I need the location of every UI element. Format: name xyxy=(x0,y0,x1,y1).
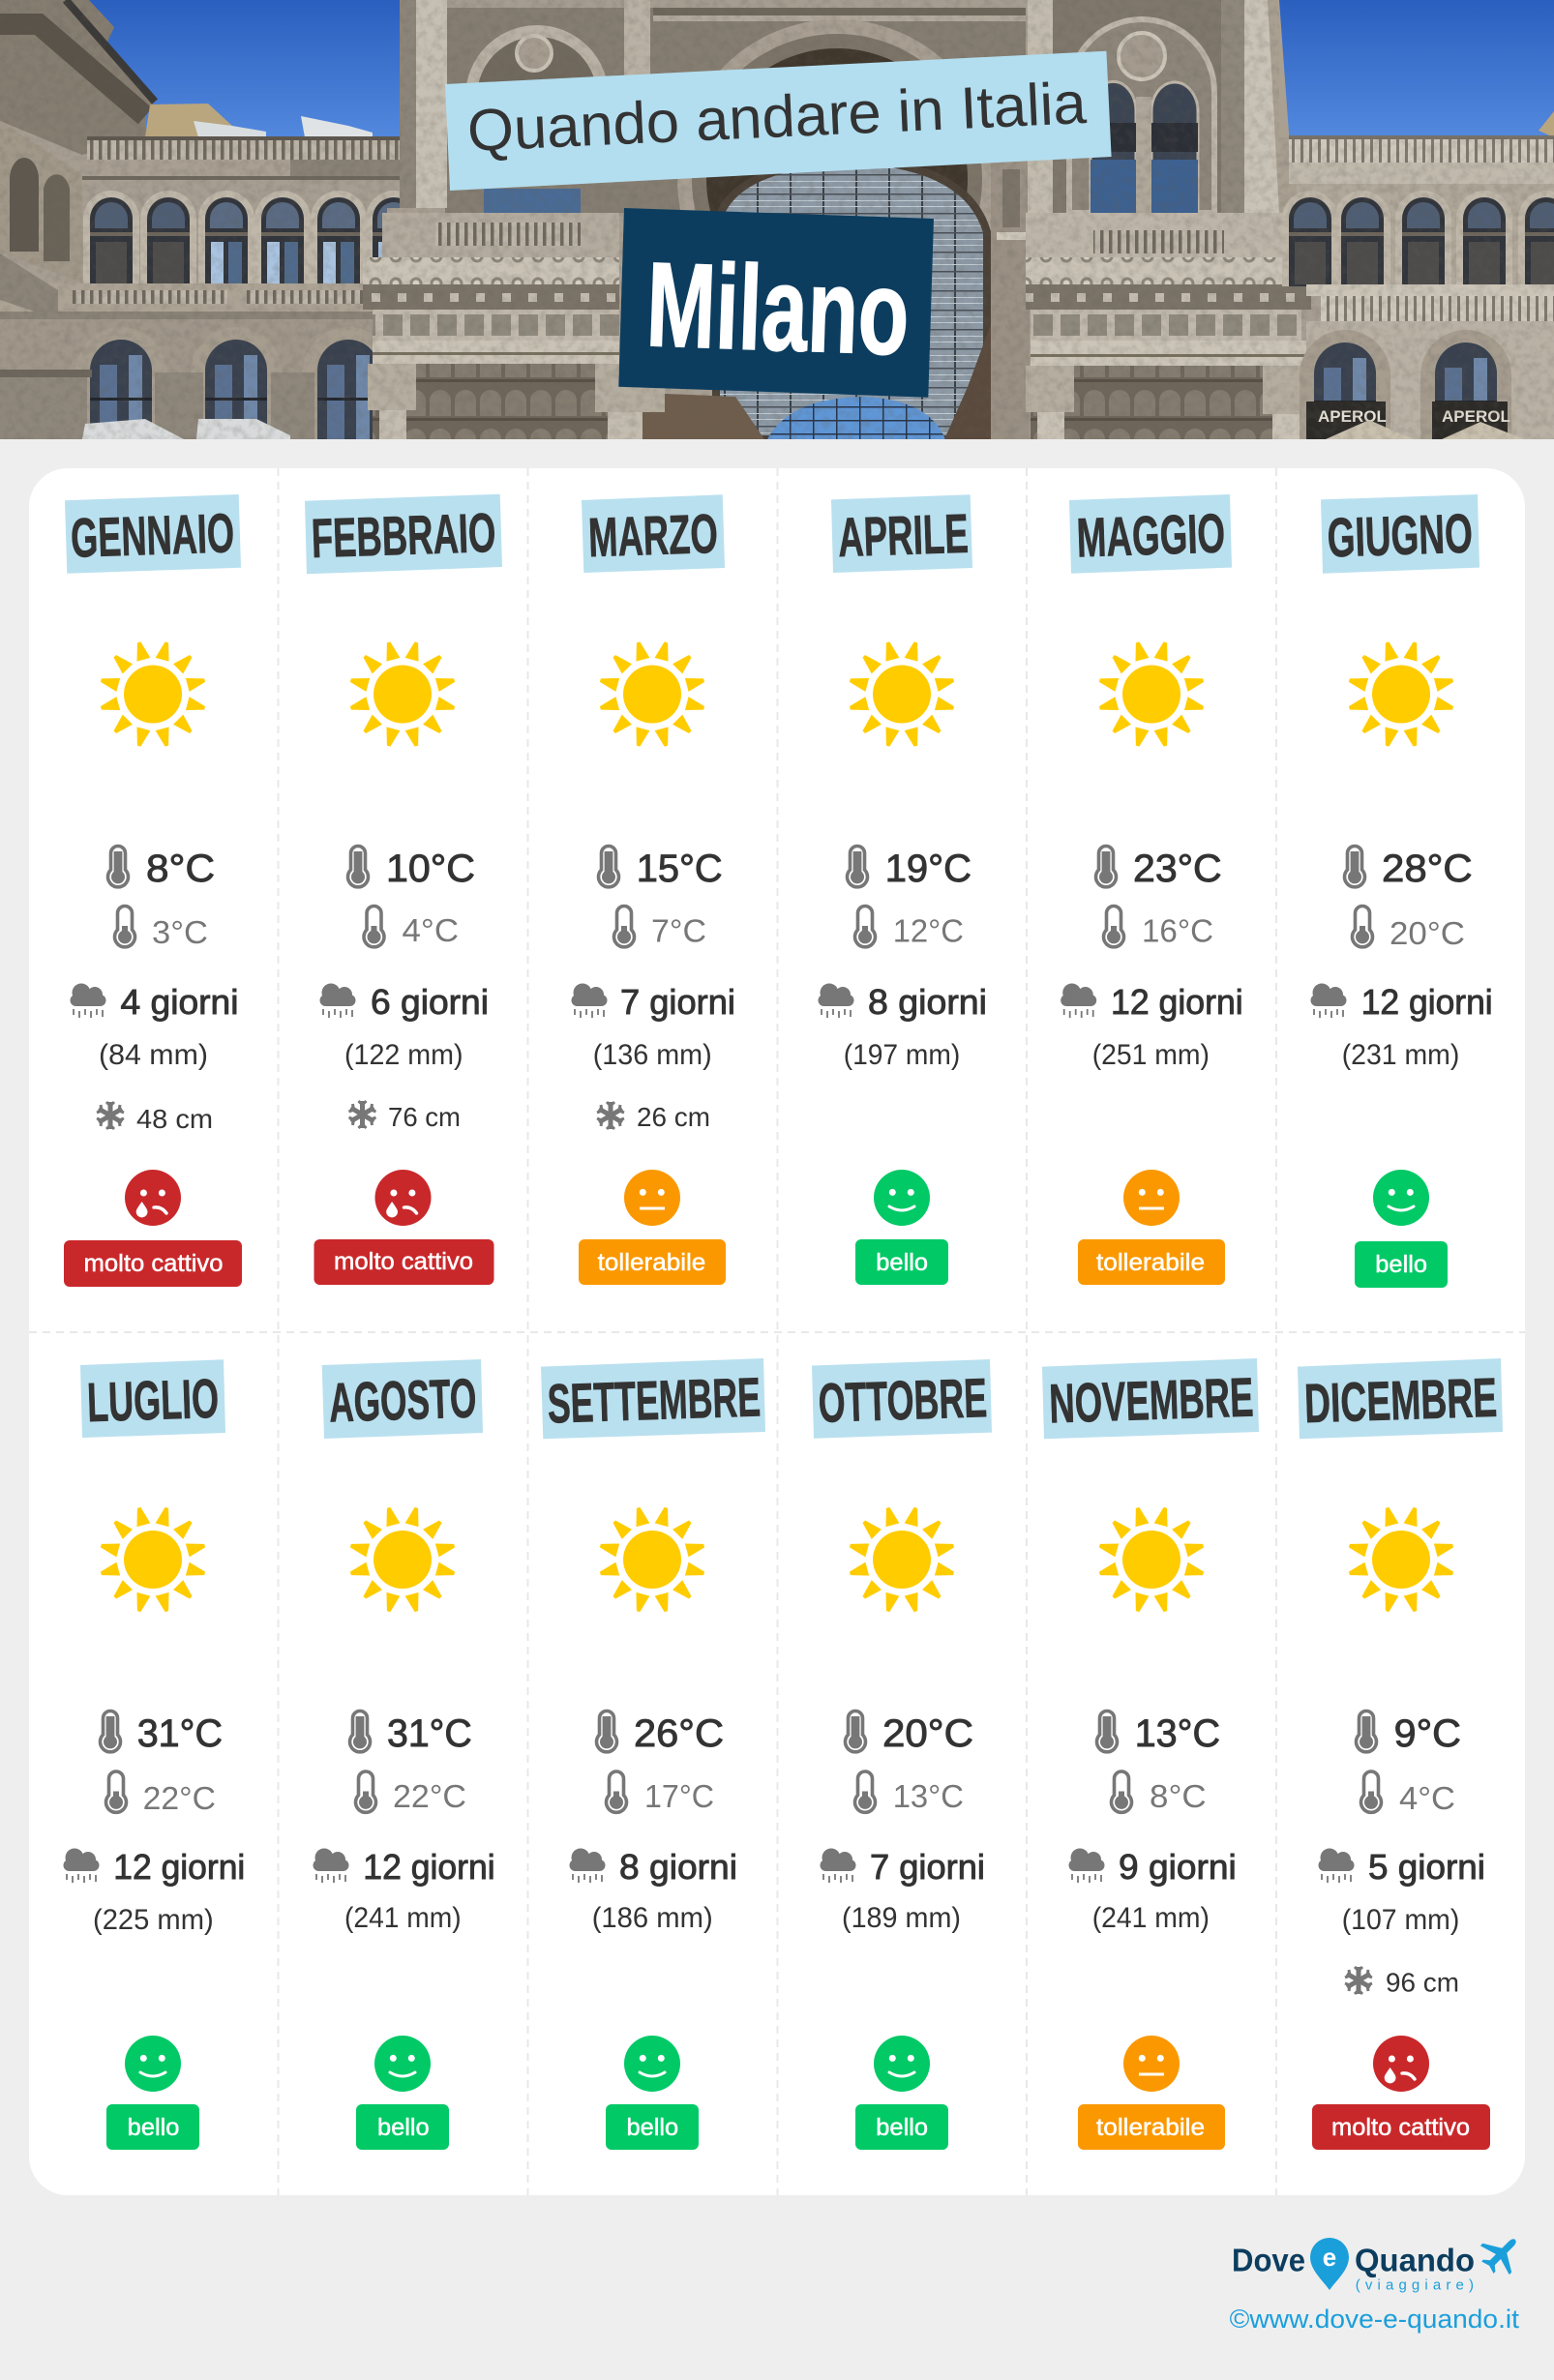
rating badge: bello xyxy=(1375,1251,1427,1278)
heading: Novembre: NOVEMBRE xyxy=(1048,1366,1254,1435)
month: Febbraio xyxy=(305,494,502,1285)
min temperature: 13°C xyxy=(893,1779,964,1815)
max temperature: 13°C xyxy=(1135,1712,1220,1755)
min temperature: 7°C xyxy=(651,913,706,950)
icon: sun xyxy=(100,640,206,748)
icon: airplane xyxy=(1473,2225,1530,2282)
rainy days xyxy=(819,982,987,1022)
rainy days: 8 giorni xyxy=(619,1847,737,1887)
max temperature: 15°C xyxy=(637,848,723,890)
rainy days xyxy=(1068,1847,1237,1887)
rating badge xyxy=(106,2104,199,2150)
heading: Ottobre: OTTOBRE xyxy=(818,1367,988,1435)
rating badge xyxy=(606,2104,699,2150)
snowfall: 48 cm xyxy=(136,1104,213,1134)
rating badge: bello xyxy=(377,2114,430,2141)
max temperature: 28°C xyxy=(1382,848,1473,890)
snowfall xyxy=(597,1102,710,1132)
header photo: Galleria facade xyxy=(0,0,1554,455)
rainy days xyxy=(571,982,735,1022)
max temperature: 10°C xyxy=(386,848,475,890)
min temperature xyxy=(855,1771,964,1815)
heading: Maggio xyxy=(1069,494,1232,574)
rating badge xyxy=(64,1240,242,1287)
rating badge xyxy=(1355,1241,1448,1288)
min temperature xyxy=(606,1771,714,1815)
footer logo: Dove e Quando viaggiare xyxy=(1232,2225,1530,2294)
rainfall: (225 mm) xyxy=(93,1904,214,1936)
heading: Agosto: AGOSTO xyxy=(328,1367,477,1435)
footer logo: Dove e Quando viaggiare: Dove xyxy=(1232,2243,1305,2278)
max temperature xyxy=(350,1711,472,1755)
min temperature: 4°C xyxy=(1399,1781,1455,1817)
rating badge: bello xyxy=(876,1249,928,1276)
heading: Giugno: GIUGNO xyxy=(1327,503,1474,569)
title banner: Quando andare in Italia xyxy=(445,51,1112,191)
rainy days: 9 giorni xyxy=(1119,1847,1237,1887)
min temperature: 22°C xyxy=(143,1781,216,1817)
heading: Maggio: MAGGIO xyxy=(1076,502,1226,570)
rating badge xyxy=(855,1239,948,1285)
rating badge: tollerabile xyxy=(598,1249,705,1276)
heading: Settembre: SETTEMBRE xyxy=(547,1366,762,1436)
month: Luglio xyxy=(64,1359,245,2150)
rating badge xyxy=(579,1239,726,1285)
rainy days: 7 giorni xyxy=(870,1847,985,1887)
icon: very sad face xyxy=(375,1170,432,1226)
max temperature: 26°C xyxy=(634,1712,724,1755)
icon: sun xyxy=(849,640,955,748)
max temperature: 31°C xyxy=(137,1712,223,1755)
month: Agosto xyxy=(314,1359,495,2150)
panel: months card xyxy=(29,468,1525,2195)
city banner: Milano xyxy=(618,208,934,398)
heading: Settembre xyxy=(541,1358,765,1439)
month: Gennaio xyxy=(64,494,242,1287)
heading: Aprile xyxy=(831,494,972,573)
icon: very sad face xyxy=(1373,2036,1429,2092)
rainy days: 12 giorni xyxy=(1361,982,1493,1022)
snowfall xyxy=(348,1101,461,1132)
icon: sun xyxy=(599,1506,705,1613)
month: Maggio xyxy=(1061,494,1243,1285)
max temperature xyxy=(101,1711,223,1755)
month: Novembre xyxy=(1042,1358,1259,2150)
heading: Gennaio xyxy=(65,494,241,574)
icon: happy face xyxy=(125,2036,181,2092)
rainfall: (231 mm) xyxy=(1342,1039,1459,1071)
rating badge: molto cattivo xyxy=(83,1250,223,1277)
min temperature xyxy=(106,1771,216,1817)
icon: map pin xyxy=(1310,2238,1349,2290)
min temperature: 4°C xyxy=(403,913,459,949)
min temperature xyxy=(364,906,459,949)
rating badge: molto cattivo xyxy=(334,1248,473,1275)
footer logo: Dove e Quando viaggiare: (viaggiare) xyxy=(1356,2277,1474,2294)
icon: neutral face xyxy=(624,1170,680,1226)
min temperature: 16°C xyxy=(1142,913,1213,950)
icon: neutral face xyxy=(1123,1170,1180,1226)
rating badge xyxy=(356,2104,449,2150)
min temperature xyxy=(855,906,964,950)
heading: Giugno xyxy=(1321,494,1479,574)
max temperature: 23°C xyxy=(1133,848,1222,890)
city banner: Milano: Milano xyxy=(644,238,911,380)
heading: Marzo: MARZO xyxy=(587,503,719,569)
icon: map pin: e xyxy=(1323,2243,1336,2272)
rainfall: (241 mm) xyxy=(1092,1902,1210,1934)
min temperature xyxy=(1360,1771,1455,1817)
snowfall: 26 cm xyxy=(637,1102,710,1132)
rainy days xyxy=(821,1847,985,1887)
max temperature xyxy=(1357,1711,1461,1755)
max temperature: 20°C xyxy=(882,1712,973,1755)
min temperature: 17°C xyxy=(644,1779,714,1815)
icon: sun xyxy=(849,1506,955,1613)
footer logo: Dove e Quando viaggiare: Quando xyxy=(1355,2243,1475,2278)
icon: happy face xyxy=(624,2036,680,2092)
max temperature xyxy=(848,846,971,890)
max temperature xyxy=(598,846,723,890)
heading: Luglio xyxy=(80,1359,225,1438)
heading: Marzo xyxy=(582,494,725,573)
heading: Febbraio: FEBBRAIO xyxy=(311,502,496,570)
footer website credit: ©www.dove-e-quando.it xyxy=(1230,2305,1520,2334)
rainy days: 12 giorni xyxy=(113,1847,245,1887)
min temperature xyxy=(1353,906,1465,952)
min temperature: 3°C xyxy=(152,915,208,951)
month: Dicembre xyxy=(1298,1358,1503,2150)
icon: happy face xyxy=(874,1170,930,1226)
min temperature: 12°C xyxy=(893,913,964,950)
icon: happy face xyxy=(1373,1170,1429,1226)
rainfall: (136 mm) xyxy=(593,1039,712,1071)
max temperature: 31°C xyxy=(387,1712,472,1755)
rainy days: 5 giorni xyxy=(1368,1847,1485,1887)
rating badge xyxy=(1312,2104,1490,2150)
max temperature: 8°C xyxy=(146,848,215,890)
max temperature: 9°C xyxy=(1394,1712,1461,1755)
header photo: Galleria facade: APEROL xyxy=(1442,407,1510,426)
icon: very sad face xyxy=(125,1170,181,1226)
rainfall: (186 mm) xyxy=(592,1902,713,1934)
icon: sun xyxy=(1348,640,1454,748)
month: Aprile xyxy=(819,494,987,1285)
month: Settembre xyxy=(541,1358,765,2150)
max temperature xyxy=(348,846,475,890)
heading: Febbraio xyxy=(305,494,502,574)
heading: Luglio: LUGLIO xyxy=(86,1368,220,1434)
rating badge: bello xyxy=(128,2114,179,2141)
rainfall: (251 mm) xyxy=(1092,1039,1210,1071)
rating badge: tollerabile xyxy=(1096,2114,1205,2141)
rainy days: 12 giorni xyxy=(1111,982,1243,1022)
max temperature xyxy=(1095,846,1222,890)
snowfall: 96 cm xyxy=(1386,1968,1459,1998)
rating badge: molto cattivo xyxy=(1331,2114,1470,2141)
max temperature: 19°C xyxy=(885,848,971,890)
max temperature xyxy=(108,846,215,890)
min temperature: 22°C xyxy=(393,1779,466,1815)
rainfall: (107 mm) xyxy=(1342,1904,1459,1936)
rainy days xyxy=(319,982,489,1022)
snowfall xyxy=(97,1102,213,1134)
icon: sun xyxy=(349,1506,456,1613)
max temperature xyxy=(596,1711,724,1755)
heading: Gennaio: GENNAIO xyxy=(70,502,235,570)
min temperature xyxy=(1111,1771,1207,1815)
month: Marzo xyxy=(571,494,735,1285)
icon: happy face xyxy=(874,2036,930,2092)
rainfall: (189 mm) xyxy=(842,1902,961,1934)
heading: Agosto xyxy=(322,1359,483,1439)
rainy days: 4 giorni xyxy=(120,982,238,1022)
rainy days: 12 giorni xyxy=(363,1847,495,1887)
rainy days: 7 giorni xyxy=(620,982,735,1022)
rating badge xyxy=(1078,1239,1225,1285)
rainy days: 8 giorni xyxy=(868,982,987,1022)
max temperature xyxy=(1097,1711,1220,1755)
icon: happy face xyxy=(374,2036,431,2092)
rating badge xyxy=(1078,2104,1225,2150)
month: Giugno xyxy=(1310,494,1493,1288)
heading: Ottobre xyxy=(812,1359,992,1439)
icon: sun xyxy=(349,640,456,748)
snowfall xyxy=(1345,1967,1459,1998)
icon: sun xyxy=(1098,1506,1205,1613)
rainfall: (122 mm) xyxy=(344,1039,463,1071)
rainfall: (197 mm) xyxy=(844,1039,960,1071)
rating badge xyxy=(855,2104,948,2150)
header photo: Galleria facade: APEROL xyxy=(1318,407,1387,426)
heading: Novembre xyxy=(1042,1358,1259,1439)
min temperature xyxy=(1103,906,1213,950)
rating badge: bello xyxy=(876,2114,928,2141)
max temperature xyxy=(846,1711,973,1755)
max temperature xyxy=(1345,846,1473,890)
rainy days: 6 giorni xyxy=(371,982,489,1022)
title banner: Quando andare in Italia: Quando andare in Italia xyxy=(466,70,1088,164)
min temperature xyxy=(613,906,706,950)
min temperature: 8°C xyxy=(1150,1779,1207,1815)
min temperature xyxy=(114,906,208,951)
icon: sun xyxy=(1098,640,1205,748)
rainfall: (241 mm) xyxy=(344,1902,462,1934)
icon: sun xyxy=(1348,1506,1454,1613)
min temperature xyxy=(356,1771,466,1815)
heading: Aprile: APRILE xyxy=(837,503,970,569)
snowfall: 76 cm xyxy=(388,1102,461,1132)
rainy days xyxy=(1318,1847,1485,1887)
rainfall: (84 mm) xyxy=(99,1039,208,1071)
rainy days xyxy=(569,1847,737,1887)
month: Ottobre xyxy=(812,1359,992,2150)
min temperature: 20°C xyxy=(1390,916,1465,952)
icon: sun xyxy=(100,1506,206,1613)
icon: sun xyxy=(599,640,705,748)
icon: neutral face xyxy=(1123,2036,1180,2092)
rainy days xyxy=(70,982,238,1022)
rating badge xyxy=(314,1239,493,1285)
rating badge: tollerabile xyxy=(1096,1249,1205,1276)
rating badge: bello xyxy=(627,2114,678,2141)
